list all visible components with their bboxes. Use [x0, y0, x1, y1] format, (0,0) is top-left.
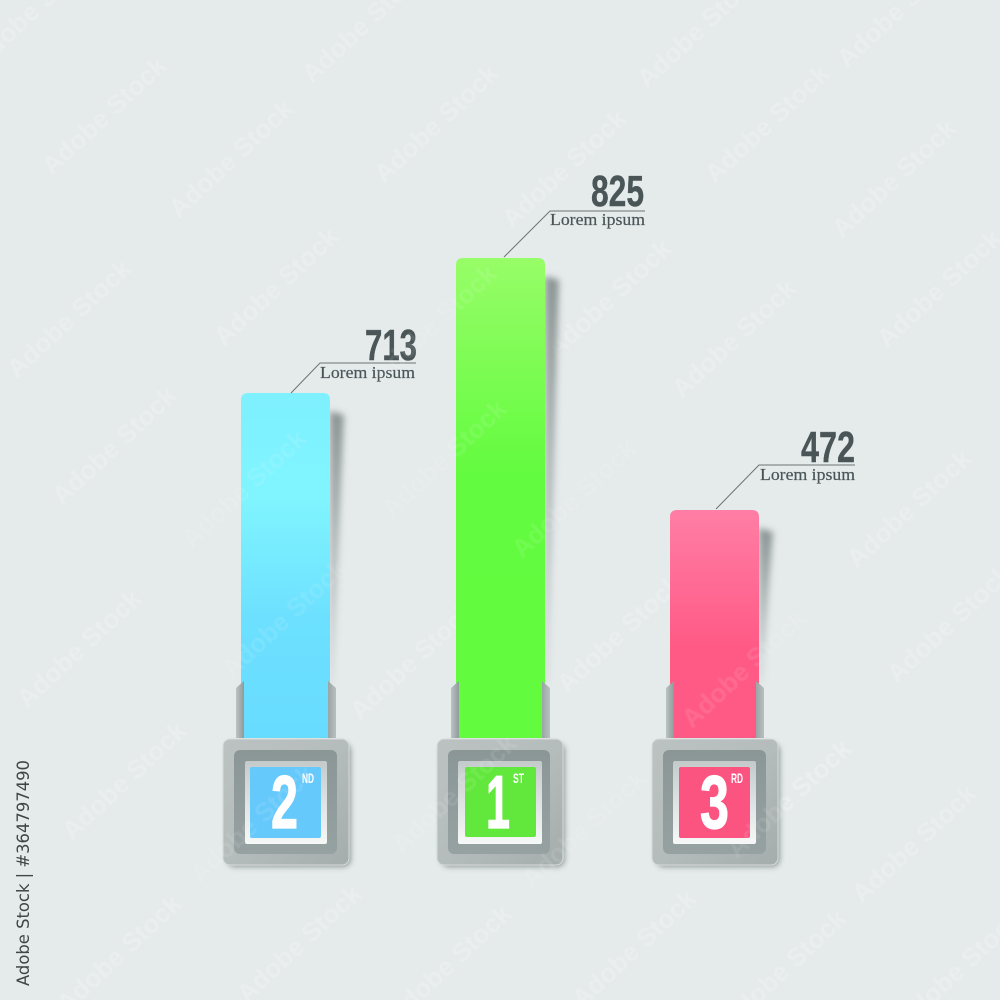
column: 1st place	[437, 167, 645, 867]
watermark overlay on chart: Adobe Stock	[516, 763, 653, 894]
watermark overlay on chart: Adobe Stock	[366, 258, 503, 389]
watermark pattern: Adobe Stock	[541, 233, 678, 364]
watermark pattern: Adobe Stock	[46, 380, 183, 511]
column: 3rd place	[652, 423, 855, 867]
watermark pattern: Adobe Stock	[11, 583, 148, 714]
bar: blue	[241, 393, 330, 738]
watermark pattern: Adobe Stock	[841, 443, 978, 574]
watermark overlay on chart: Adobe Stock	[506, 433, 643, 564]
rank number 3rd: RD	[731, 770, 743, 786]
watermark overlay on chart: Adobe Stock	[721, 733, 858, 864]
watermark pattern: Adobe Stock	[721, 733, 858, 864]
callout: 825: Lorem ipsum	[550, 210, 645, 229]
rank number 1st: ST	[513, 770, 524, 786]
watermark overlay on chart: Adobe Stock	[184, 758, 321, 889]
callout: 713: 713	[365, 321, 417, 370]
watermark pattern: Adobe Stock	[1, 253, 138, 384]
watermark pattern: Adobe Stock	[699, 58, 836, 189]
column: 2nd place	[223, 321, 417, 867]
bracket tabs: green	[451, 681, 550, 738]
callout: 472: 472	[801, 423, 855, 472]
callout: 472	[716, 423, 855, 509]
medal: 2nd	[223, 739, 351, 867]
medal: 3rd	[652, 739, 780, 867]
callout: 713: Lorem ipsum	[320, 363, 415, 382]
watermark pattern: Adobe Stock	[344, 595, 481, 726]
watermark overlay on chart: Adobe Stock	[216, 553, 353, 684]
watermark pattern: Adobe Stock	[208, 221, 345, 352]
callout: 825: 825	[591, 167, 644, 216]
watermark overlay on chart: Adobe Stock	[376, 393, 513, 524]
rank number 1st: 1	[486, 760, 510, 844]
medal: 1st	[437, 739, 565, 867]
callout: 825	[504, 167, 645, 257]
watermark overlay on chart: Adobe Stock	[386, 728, 523, 859]
bracket tabs: pink	[666, 681, 764, 738]
watermark overlay on chart	[176, 258, 858, 894]
bar shadow: blue	[330, 411, 344, 682]
watermark pattern: Adobe Stock	[368, 58, 505, 189]
callout: 472: Lorem ipsum	[760, 465, 855, 484]
stock id side text: Adobe Stock | #364797490	[14, 760, 33, 986]
watermark overlay on chart: Adobe Stock	[676, 603, 813, 734]
watermark pattern: Adobe Stock	[56, 715, 193, 846]
watermark pattern: Adobe Stock	[551, 568, 688, 699]
callout: 713	[291, 321, 417, 393]
watermark pattern: Adobe Stock	[846, 778, 983, 909]
bar: green	[456, 258, 545, 738]
watermark overlay on chart: Adobe Stock	[176, 423, 313, 554]
rank number 2nd: 2	[271, 760, 298, 844]
watermark pattern: Adobe Stock	[496, 103, 633, 234]
watermark pattern: Adobe Stock	[666, 273, 803, 404]
bar shadow: green	[545, 276, 559, 682]
bar: pink	[670, 510, 759, 738]
rank number 2nd: ND	[302, 770, 314, 786]
bracket tabs: blue	[236, 681, 336, 738]
watermark pattern: Adobe Stock	[826, 113, 963, 244]
rank number 3rd: 3	[700, 760, 729, 844]
watermark pattern: Adobe Stock	[36, 50, 173, 181]
bar shadow: pink	[759, 528, 773, 682]
watermark pattern: Adobe Stock	[163, 93, 300, 224]
